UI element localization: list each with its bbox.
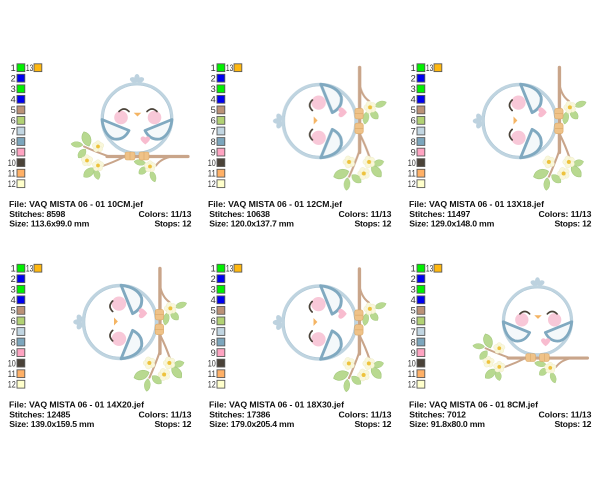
legend: numbers: 6	[411, 316, 416, 326]
legend: numbers: 1	[11, 63, 16, 73]
legend: numbers	[208, 63, 233, 189]
panel: 12CM design	[208, 63, 392, 228]
legend: numbers: 13	[426, 63, 433, 73]
legend: numbers: 2	[411, 274, 416, 284]
legend: numbers: 2	[211, 74, 216, 84]
legend: colour swatches	[17, 264, 42, 388]
legend: numbers: 13	[426, 264, 433, 274]
legend: numbers: 3	[211, 84, 216, 94]
legend: numbers: 9	[11, 348, 16, 358]
legend: numbers: 12	[208, 380, 216, 390]
file info: Stops: 12	[154, 419, 192, 429]
file info: File: VAQ MISTA 06 - 01 10CM.jef	[9, 199, 143, 209]
legend: numbers: 7	[411, 126, 416, 136]
legend: numbers: 8	[11, 337, 16, 347]
legend: numbers: 10	[208, 158, 216, 168]
file info	[9, 199, 192, 228]
file info: Stitches: 17386	[209, 409, 270, 419]
file info: File: VAQ MISTA 06 - 01 12CM.jef	[208, 199, 342, 209]
file info: File: VAQ MISTA 06 - 01 13X18.jef	[409, 199, 544, 209]
file info: Colors: 11/13	[138, 409, 192, 419]
legend: colour swatches	[417, 64, 442, 188]
embroidery: bird on horizontal branch	[473, 277, 587, 384]
file info: Stitches: 11497	[409, 209, 470, 219]
legend: numbers: 9	[11, 147, 16, 157]
file info: Stitches: 10638	[209, 209, 270, 219]
file info: Stops: 12	[354, 419, 392, 429]
embroidery: bird on vertical branch	[273, 269, 387, 392]
legend: numbers: 5	[411, 105, 416, 115]
legend: numbers: 11	[8, 168, 16, 178]
legend: numbers: 2	[11, 274, 16, 284]
legend: numbers: 5	[11, 306, 16, 316]
legend: numbers	[208, 264, 233, 390]
legend: numbers: 9	[411, 147, 416, 157]
legend: numbers: 13	[226, 264, 233, 274]
file info: Colors: 11/13	[138, 209, 192, 219]
legend: numbers: 7	[211, 327, 216, 337]
file info: Stops: 12	[554, 218, 592, 228]
file info: File: VAQ MISTA 06 - 01 14X20.jef	[9, 400, 144, 410]
legend: numbers: 3	[211, 285, 216, 295]
file info	[209, 400, 392, 429]
legend: numbers: 11	[8, 369, 16, 379]
legend: numbers: 6	[11, 316, 16, 326]
legend: numbers: 4	[211, 95, 216, 105]
legend: numbers: 12	[208, 179, 216, 189]
legend: numbers: 7	[11, 327, 16, 337]
legend: numbers: 5	[211, 105, 216, 115]
legend: numbers: 11	[208, 168, 216, 178]
file info: Size: 91.8x80.0 mm	[409, 419, 485, 429]
file info: Size: 179.0x205.4 mm	[209, 419, 295, 429]
legend: numbers: 11	[408, 369, 416, 379]
legend: numbers: 10	[8, 158, 16, 168]
embroidery: bird on vertical branch	[473, 67, 587, 191]
file info: File: VAQ MISTA 06 - 01 8CM.jef	[409, 400, 538, 410]
legend: numbers: 2	[211, 274, 216, 284]
legend: numbers: 3	[411, 84, 416, 94]
file info: Stitches: 12485	[9, 409, 70, 419]
file info	[409, 199, 592, 228]
legend: numbers	[408, 264, 433, 390]
legend: numbers: 4	[11, 95, 16, 105]
legend: numbers: 10	[408, 358, 416, 368]
legend: numbers: 7	[11, 126, 16, 136]
legend: numbers: 9	[211, 348, 216, 358]
legend: numbers	[8, 63, 33, 189]
legend: numbers: 12	[8, 380, 16, 390]
legend: numbers: 1	[411, 264, 416, 274]
legend: numbers	[408, 63, 433, 189]
legend: numbers: 2	[411, 74, 416, 84]
panel: 10CM design	[8, 63, 192, 228]
panel: 8CM design	[408, 264, 592, 429]
legend: numbers: 8	[411, 137, 416, 147]
legend: numbers: 7	[411, 327, 416, 337]
legend: numbers: 4	[411, 295, 416, 305]
legend: numbers: 2	[11, 74, 16, 84]
legend: numbers: 8	[11, 137, 16, 147]
legend: colour swatches	[417, 264, 442, 388]
legend: numbers: 4	[411, 95, 416, 105]
legend: numbers: 12	[408, 179, 416, 189]
legend: numbers: 9	[411, 348, 416, 358]
file info: Size: 139.0x159.5 mm	[9, 419, 95, 429]
legend: numbers: 1	[211, 264, 216, 274]
legend: numbers: 9	[211, 147, 216, 157]
legend: numbers: 10	[408, 158, 416, 168]
legend: numbers: 8	[211, 337, 216, 347]
legend: numbers: 8	[211, 137, 216, 147]
legend: numbers: 6	[411, 116, 416, 126]
legend: numbers: 11	[408, 168, 416, 178]
file info: File: VAQ MISTA 06 - 01 18X30.jef	[209, 400, 344, 410]
file info: Size: 129.0x148.0 mm	[409, 218, 495, 228]
legend: numbers: 1	[411, 63, 416, 73]
panel: 18X30 design	[208, 264, 392, 429]
embroidery: bird on vertical branch	[73, 268, 188, 392]
legend: numbers: 6	[211, 116, 216, 126]
legend: numbers: 11	[208, 369, 216, 379]
legend: numbers: 7	[211, 126, 216, 136]
file info: Stops: 12	[354, 218, 392, 228]
file info: Colors: 11/13	[538, 209, 592, 219]
file info: Size: 120.0x137.7 mm	[209, 218, 294, 228]
file info	[208, 199, 392, 228]
legend: numbers: 5	[411, 306, 416, 316]
legend: numbers	[8, 264, 33, 390]
file info: Colors: 11/13	[338, 409, 392, 419]
file info	[9, 400, 192, 429]
panel: 13X18 design	[408, 63, 592, 228]
legend: numbers: 3	[11, 285, 16, 295]
legend: numbers: 13	[26, 264, 33, 274]
embroidery: bird on horizontal branch	[71, 74, 188, 183]
legend: numbers: 3	[411, 285, 416, 295]
file info: Size: 113.6x99.0 mm	[9, 218, 90, 228]
panel: 14X20 design	[8, 264, 192, 429]
legend: numbers: 5	[11, 105, 16, 115]
file info: Colors: 11/13	[538, 409, 592, 419]
legend: colour swatches	[217, 264, 242, 388]
embroidery: bird on vertical branch	[273, 67, 387, 191]
legend: numbers: 13	[226, 63, 233, 73]
legend: numbers: 12	[8, 179, 16, 189]
legend: colour swatches	[217, 64, 242, 188]
file info	[409, 400, 592, 429]
legend: colour swatches	[17, 64, 42, 188]
legend: numbers: 13	[26, 63, 33, 73]
file info: Stitches: 8598	[9, 209, 65, 219]
file info: Stops: 12	[154, 218, 192, 228]
legend: numbers: 3	[11, 84, 16, 94]
file info: Stops: 12	[554, 419, 592, 429]
legend: numbers: 6	[211, 316, 216, 326]
legend: numbers: 4	[211, 295, 216, 305]
file info: Colors: 11/13	[338, 209, 392, 219]
legend: numbers: 1	[211, 63, 216, 73]
legend: numbers: 12	[408, 380, 416, 390]
legend: numbers: 6	[11, 116, 16, 126]
legend: numbers: 8	[411, 337, 416, 347]
legend: numbers: 10	[8, 358, 16, 368]
legend: numbers: 10	[208, 358, 216, 368]
file info: Stitches: 7012	[409, 409, 466, 419]
legend: numbers: 1	[11, 264, 16, 274]
legend: numbers: 4	[11, 295, 16, 305]
legend: numbers: 5	[211, 306, 216, 316]
